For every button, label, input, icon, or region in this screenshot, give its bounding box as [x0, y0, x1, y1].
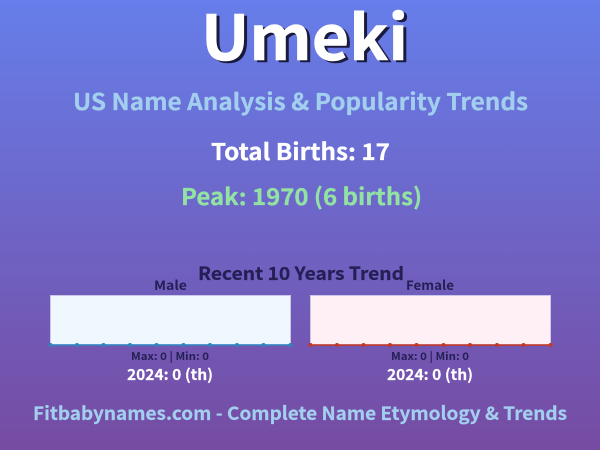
female label: Female: [406, 275, 454, 294]
panel: female chart: [308, 275, 552, 385]
subtitle: US Name Analysis & Popularity Trends: [73, 83, 528, 117]
male latest value: 2024: 0 (th): [127, 364, 213, 385]
male range: Max: 0 | Min: 0: [131, 349, 209, 364]
female range: Max: 0 | Min: 0: [391, 349, 469, 364]
peak: Peak: 1970 (6 births): [181, 178, 422, 212]
male plot area: [50, 296, 290, 345]
female latest value: 2024: 0 (th): [387, 364, 473, 385]
trend heading: Recent 10 Years Trend: [198, 260, 404, 286]
panel: male chart: [48, 275, 292, 385]
female trend line: [308, 343, 552, 347]
male label: Male: [154, 275, 187, 294]
total births: Total Births: 17: [211, 133, 390, 167]
footer: Fitbabynames.com - Complete Name Etymology & Trends: [33, 400, 567, 426]
male trend line: [48, 343, 292, 347]
female plot area: [310, 296, 550, 345]
